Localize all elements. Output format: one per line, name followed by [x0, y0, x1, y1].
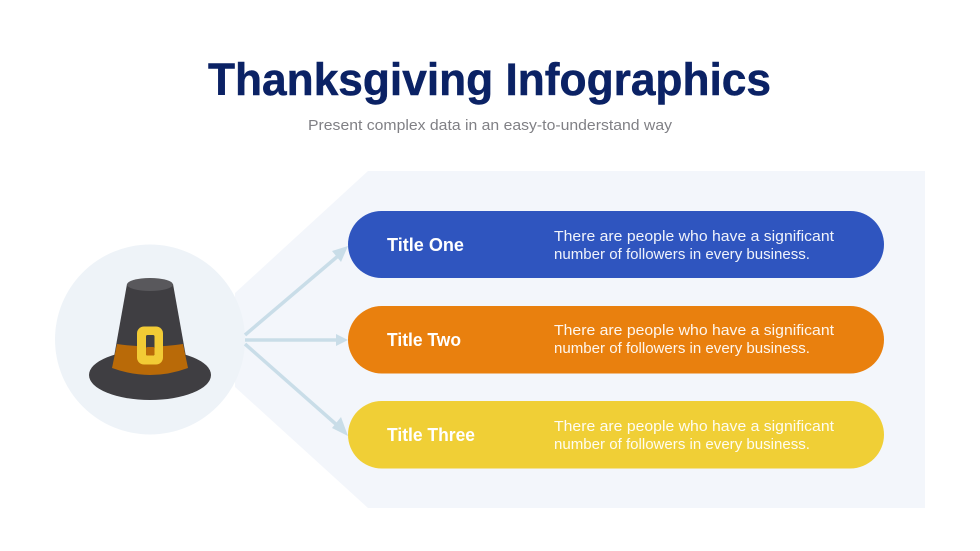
- arrow to title one: [245, 246, 348, 335]
- panel: title two: [348, 306, 884, 374]
- subtitle: Present complex data in an easy-to-understand way: [308, 117, 673, 134]
- heading: title two: Title Two: [387, 329, 461, 350]
- panel: title three: [348, 401, 884, 468]
- arrow to title two: [245, 334, 348, 346]
- text block: title three description: number of followers in every business.: [554, 436, 810, 453]
- panel: title one: [348, 211, 884, 278]
- panel: background arrow shape: [235, 171, 925, 508]
- icon: pilgrim hat: [89, 278, 211, 400]
- text block: title three description: There are people who have a significant: [554, 418, 835, 435]
- text block: title two description: There are people who have a significant: [554, 322, 835, 339]
- heading: title three: Title Three: [387, 424, 475, 445]
- arrow to title three: [245, 344, 348, 436]
- text block: title two description: number of followers in every business.: [554, 340, 810, 357]
- text block: title one description: number of followers in every business.: [554, 246, 810, 263]
- heading: title one: Title One: [387, 234, 464, 255]
- icon circle with hat: [55, 244, 245, 434]
- title: Thanksgiving Infographics: [208, 54, 771, 105]
- text block: title one description: There are people who have a significant: [554, 228, 835, 245]
